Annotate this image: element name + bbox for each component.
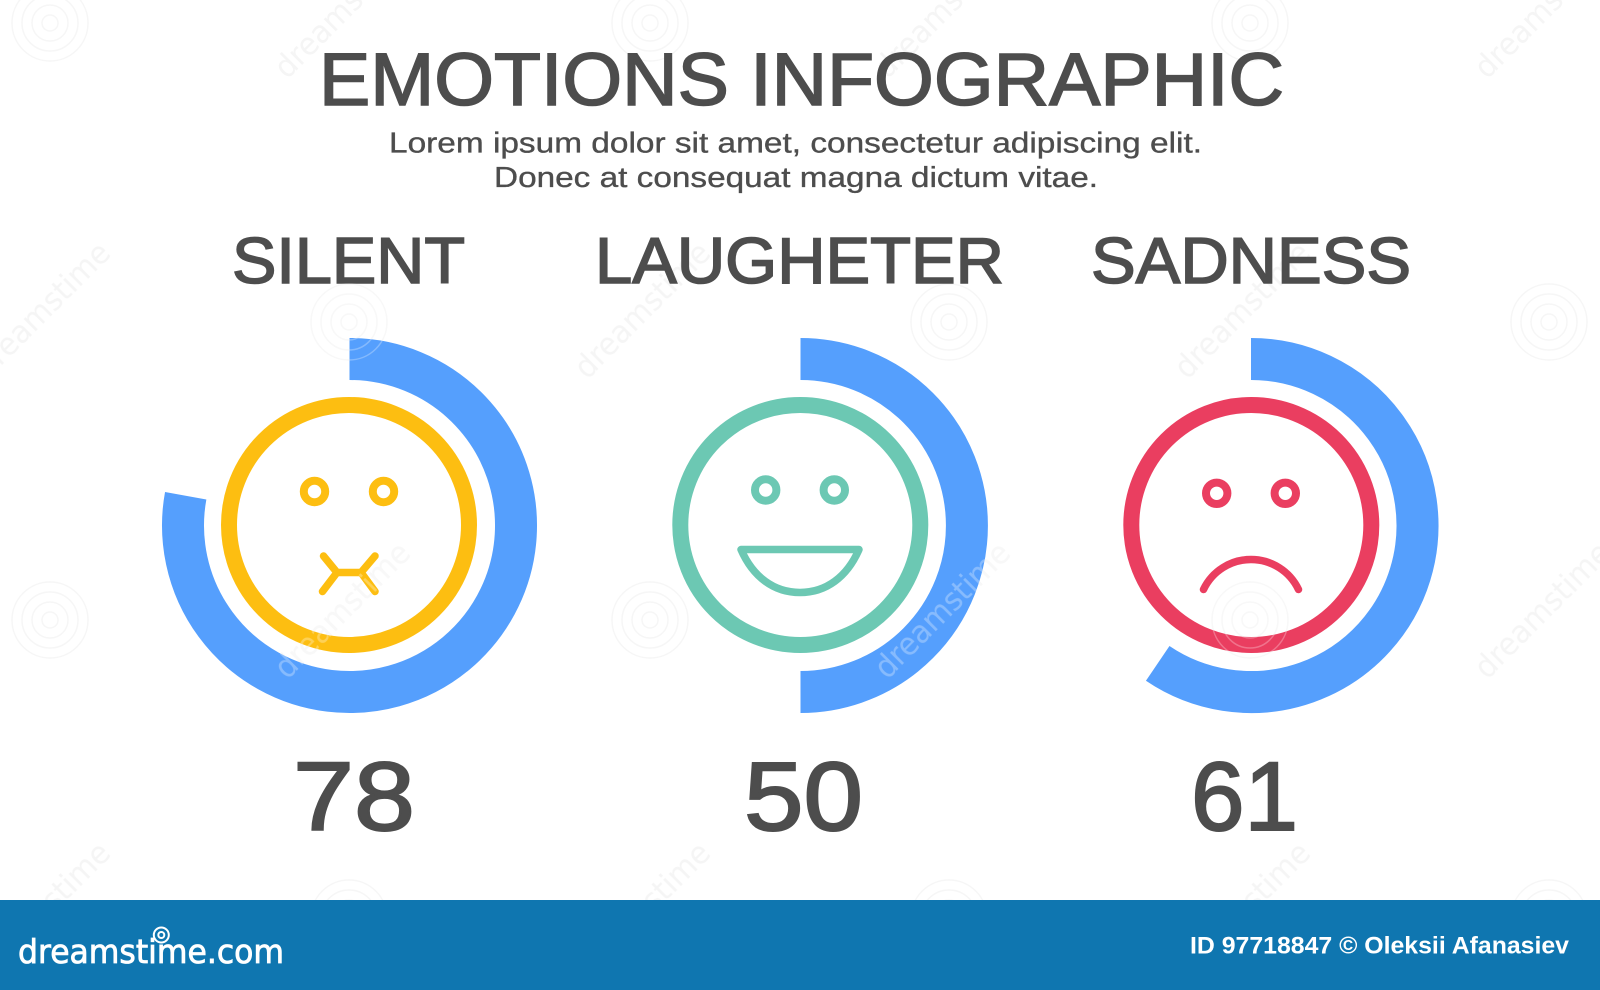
panel: silent — [183, 224, 516, 851]
panel: sadness — [1091, 224, 1418, 851]
text: dreamstime — [267, 535, 418, 686]
subtitle text block: Lorem ipsum dolor sit amet, consectetur adipiscing elit. — [389, 128, 1202, 160]
value: 50: 50 — [744, 742, 863, 851]
progress ring: 50 — [800, 359, 967, 692]
image credit: ID 97718847 © Oleksii Afanasiev — [1190, 932, 1570, 960]
icon: laughing face — [680, 405, 920, 645]
value: 78: 78 — [293, 742, 415, 851]
progress ring: 78 — [183, 359, 516, 692]
text: dreamstime — [1167, 835, 1318, 986]
panel: laughter — [595, 224, 1004, 851]
icon: silent face — [229, 405, 469, 645]
logo: dreamstime.com: dreamstime.com — [18, 932, 284, 971]
heading: silent: SILENT — [232, 224, 465, 297]
subtitle text block — [389, 128, 1202, 194]
text: dreamstime — [567, 835, 718, 986]
text: dreamstime — [267, 535, 418, 686]
text: dreamstime — [567, 235, 718, 386]
value: 61: 61 — [1191, 742, 1298, 851]
icon: sad face — [1131, 405, 1371, 645]
text: dreamstime — [867, 535, 1018, 686]
heading: sadness: SADNESS — [1091, 224, 1411, 297]
progress ring: 61 — [1158, 359, 1418, 692]
subtitle text block: Donec at consequat magna dictum vitae. — [494, 162, 1098, 194]
title: EMOTIONS INFOGRAPHIC — [319, 38, 1284, 121]
heading: laughter: LAUGHETER — [595, 224, 1004, 297]
text: dreamstime — [867, 535, 1018, 686]
footer bar — [0, 900, 1600, 990]
text: dreamstime — [1167, 235, 1318, 386]
